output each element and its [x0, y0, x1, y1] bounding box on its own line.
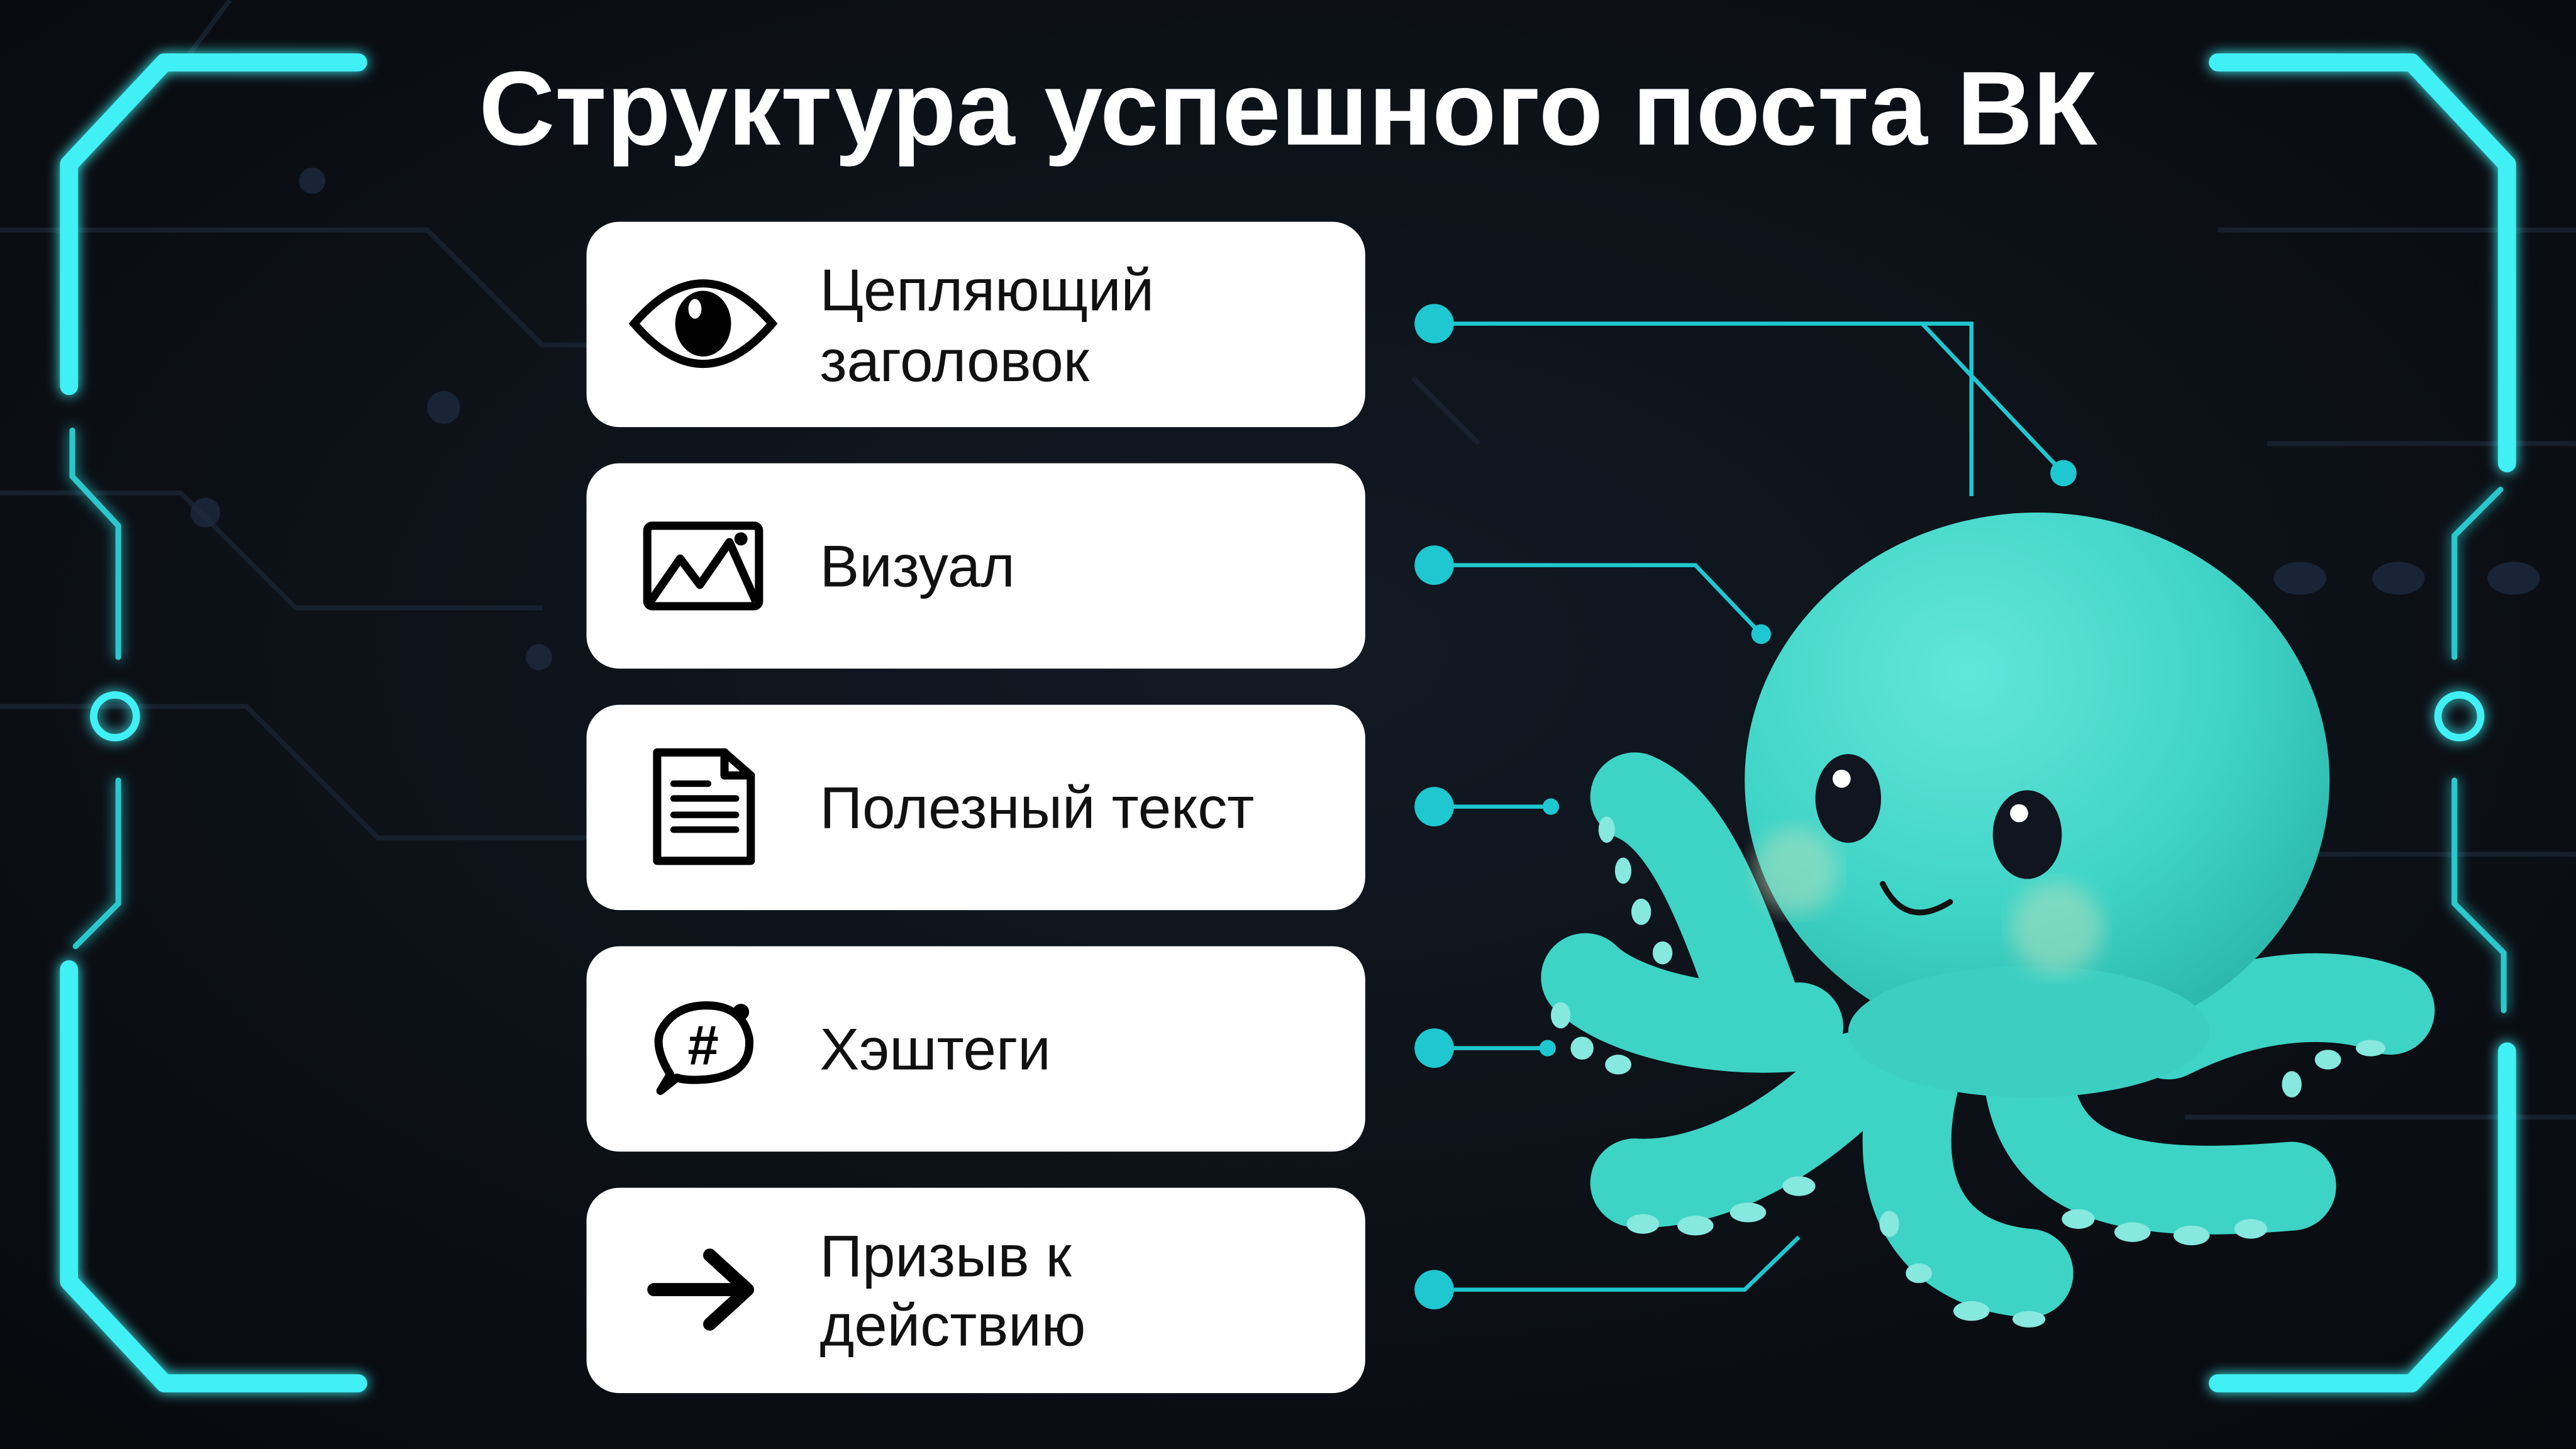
card: call to action: Призыв к — [820, 1223, 1072, 1289]
icon: hashtag bubble — [658, 1004, 750, 1091]
octopus mascot — [1551, 513, 2390, 1328]
card: useful text — [587, 705, 1365, 910]
face — [1753, 754, 2103, 974]
icon: image — [647, 526, 759, 606]
card: hook headline: Цепляющий — [820, 257, 1154, 323]
card: call to action — [587, 1188, 1365, 1393]
icon: document — [657, 752, 751, 861]
card: hashtags: Хэштеги — [820, 1016, 1051, 1082]
card: hashtags — [587, 947, 1365, 1152]
card: visual — [587, 464, 1365, 669]
card: hook headline: заголовок — [820, 328, 1090, 394]
icon: arrow — [654, 1255, 748, 1324]
card: hook headline — [587, 222, 1365, 427]
card: call to action: действию — [820, 1292, 1085, 1358]
title: Структура успешного поста ВК — [479, 50, 2097, 167]
card: useful text: Полезный текст — [820, 775, 1254, 841]
icon: hashtag bubble: # — [687, 1014, 719, 1077]
card: visual: Визуал — [820, 533, 1015, 599]
connector lines — [1414, 304, 2077, 1309]
icon: eye — [634, 284, 772, 364]
